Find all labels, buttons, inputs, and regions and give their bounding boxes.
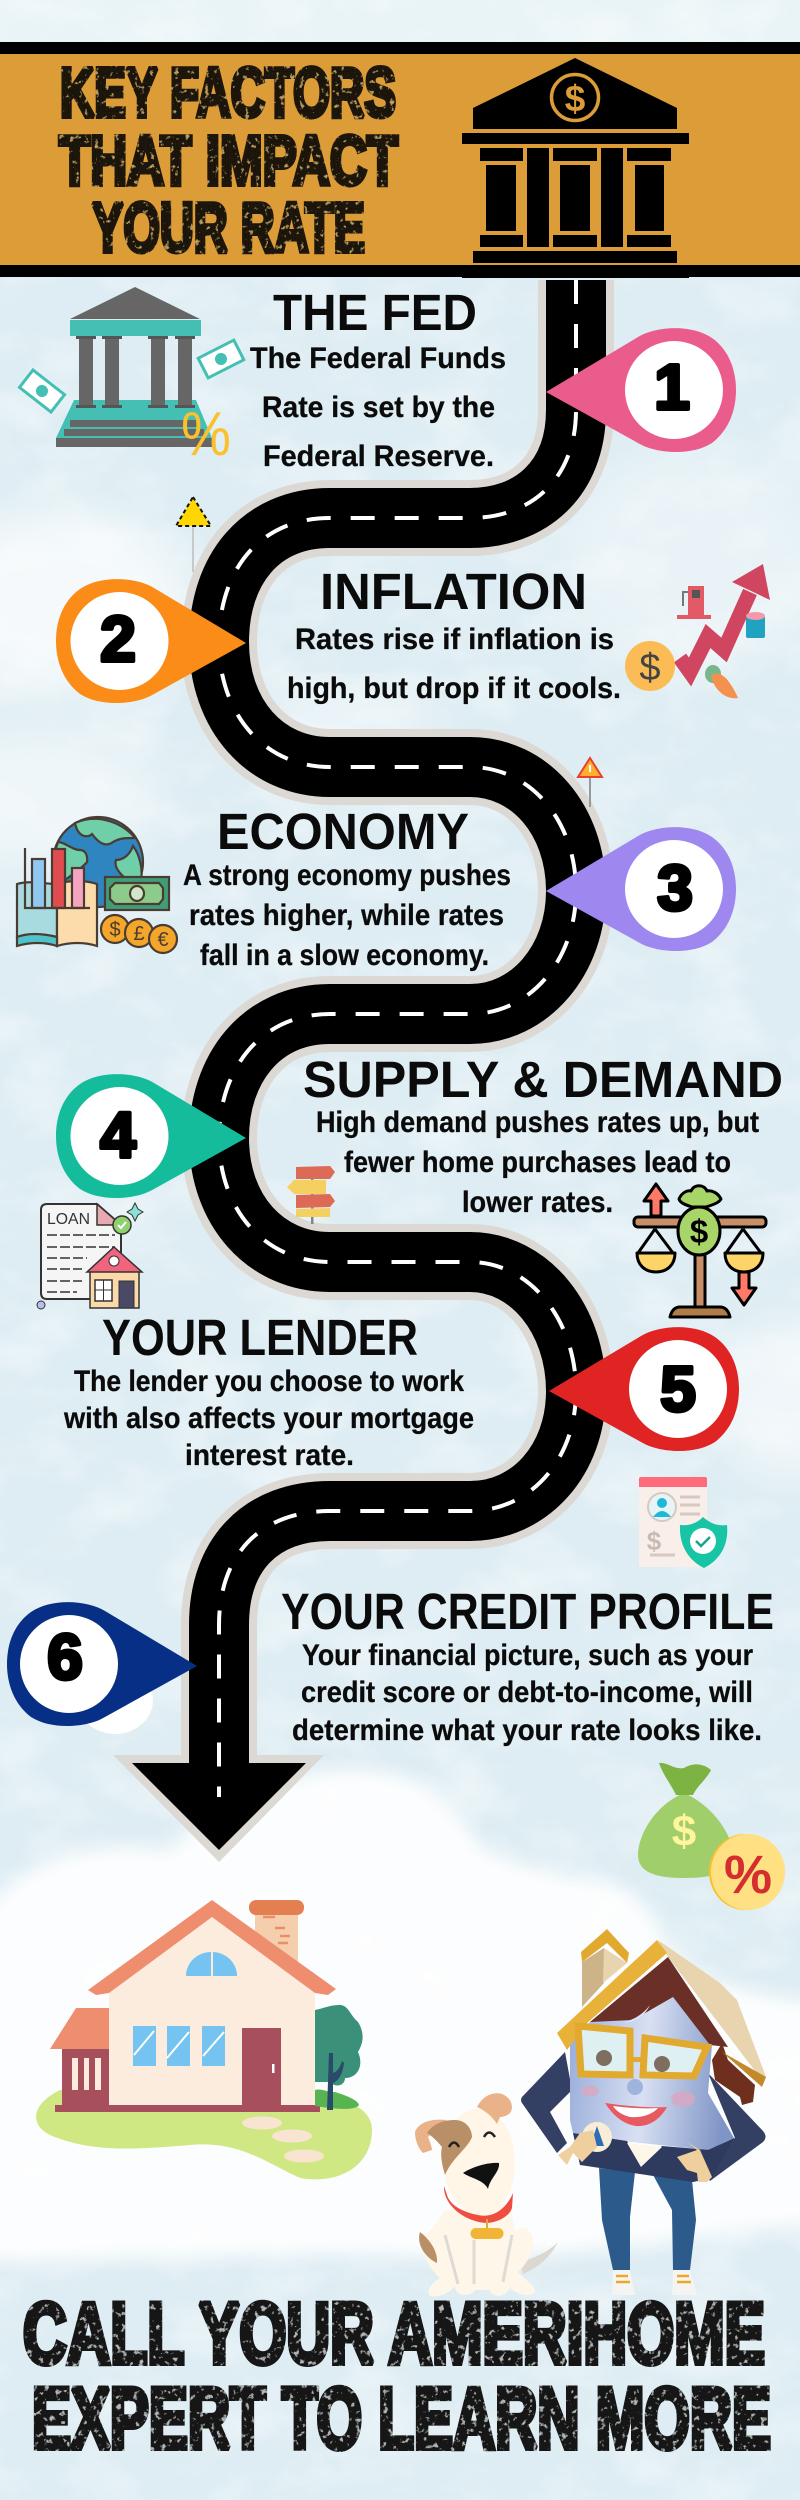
icon: signpost <box>287 1166 335 1224</box>
cheeks <box>581 2086 599 2096</box>
call to action <box>23 2286 771 2467</box>
pin 5 <box>549 1327 739 1451</box>
road with arrow <box>113 280 576 1862</box>
icon: world economy <box>17 817 177 953</box>
body: the fed <box>250 342 506 473</box>
body: supply and demand: High demand pushes rates up, but <box>316 1106 759 1139</box>
icon: loan document <box>37 1203 143 1309</box>
body: the fed: The Federal Funds <box>250 342 506 375</box>
pin 2: 2 <box>100 603 136 675</box>
icon: money bag and percent coin: $ <box>672 1807 696 1856</box>
body: your credit profile <box>292 1639 762 1747</box>
roof top <box>658 1940 766 2080</box>
body: the fed: Federal Reserve. <box>263 440 494 473</box>
header title: THAT IMPACT <box>59 122 398 200</box>
icon: rising prices <box>625 564 770 698</box>
header banner <box>0 42 800 278</box>
step 4: supply and demand <box>56 1051 783 1317</box>
icon: rising prices: $ <box>639 647 661 689</box>
pin 2 <box>56 579 246 703</box>
header title <box>59 54 398 266</box>
body: supply and demand <box>316 1106 759 1219</box>
icon: balance scale: $ <box>690 1213 708 1250</box>
step 3: economy <box>17 803 736 972</box>
pin 1 <box>546 328 736 452</box>
hair <box>590 1957 728 2047</box>
icon: credit report with shield <box>639 1477 727 1568</box>
step 5: your lender <box>37 1203 739 1472</box>
header title: YOUR RATE <box>92 188 365 266</box>
pin 4 <box>56 1074 246 1198</box>
heading: supply and demand: SUPPLY & DEMAND <box>303 1051 783 1108</box>
icon: warning sign yellow <box>176 497 211 572</box>
body: your lender <box>63 1365 474 1472</box>
step 2: inflation <box>56 563 770 705</box>
step 6: your credit profile <box>7 1583 785 1910</box>
heading: your lender: YOUR LENDER <box>102 1309 418 1366</box>
pin 5: 5 <box>660 1353 696 1425</box>
body: your lender: The lender you choose to work <box>74 1365 464 1398</box>
icon: credit report with shield: $ <box>647 1526 662 1556</box>
chimney <box>582 1948 604 2007</box>
illustration: house <box>36 1900 372 2179</box>
icon: world economy: $ <box>109 919 121 941</box>
body: inflation: high, but drop if it cools. <box>287 672 621 705</box>
icon: balance scale <box>634 1184 766 1317</box>
badge <box>582 2122 612 2152</box>
body: inflation: Rates rise if inflation is <box>295 623 614 656</box>
body: economy <box>183 859 511 972</box>
eyes <box>578 2026 630 2075</box>
jacket <box>573 2133 734 2182</box>
pin 3: 3 <box>657 852 693 924</box>
illustration: house mascot <box>521 1929 766 2295</box>
body: your lender: interest rate. <box>185 1439 354 1472</box>
body: inflation <box>287 623 621 705</box>
pin 6 <box>7 1602 197 1726</box>
roof edges <box>557 1940 667 2050</box>
body: economy: A strong economy pushes <box>183 859 511 892</box>
body: supply and demand: fewer home purchases lead to <box>344 1146 731 1179</box>
pin 3 <box>546 827 736 951</box>
icon: federal building <box>19 287 244 469</box>
icon: bank <box>462 58 689 278</box>
icon: federal building: % <box>181 400 231 469</box>
body: supply and demand: lower rates. <box>462 1186 613 1219</box>
icon: warning sign orange <box>578 758 602 807</box>
header title: KEY FACTORS <box>60 54 396 132</box>
step 1: the fed <box>19 284 736 473</box>
legs <box>599 2168 696 2270</box>
body: economy: fall in a slow economy. <box>200 939 489 972</box>
heading: economy: ECONOMY <box>217 803 469 860</box>
arms <box>521 2052 572 2153</box>
icon: loan document: LOAN <box>47 1211 90 1228</box>
pin 4: 4 <box>100 1099 136 1171</box>
body: your credit profile: Your financial picture, such as your <box>302 1639 753 1672</box>
body: your lender: with also affects your mortgage <box>63 1402 474 1435</box>
body: the fed: Rate is set by the <box>262 391 495 424</box>
hands <box>558 2130 597 2165</box>
icon: world economy: £ <box>133 923 145 945</box>
nose <box>627 2079 643 2095</box>
pin 1: 1 <box>654 351 690 423</box>
body: your credit profile: credit score or debt-to-income, will <box>301 1676 753 1709</box>
body: your credit profile: determine what your rate looks like. <box>292 1714 762 1747</box>
heading: inflation: INFLATION <box>320 563 587 620</box>
icon: money bag and percent coin <box>638 1763 785 1910</box>
sneakers <box>612 2270 697 2295</box>
pin 6: 6 <box>47 1621 83 1693</box>
icon: world economy: € <box>157 929 169 951</box>
house face <box>570 1997 734 2150</box>
illustration: dog <box>415 2093 558 2296</box>
heading: the fed: THE FED <box>273 284 477 341</box>
icon: bank: $ <box>565 78 586 119</box>
mouth <box>605 2103 667 2126</box>
icon: money bag and percent coin: % <box>724 1845 772 1905</box>
body: economy: rates higher, while rates <box>189 899 504 932</box>
